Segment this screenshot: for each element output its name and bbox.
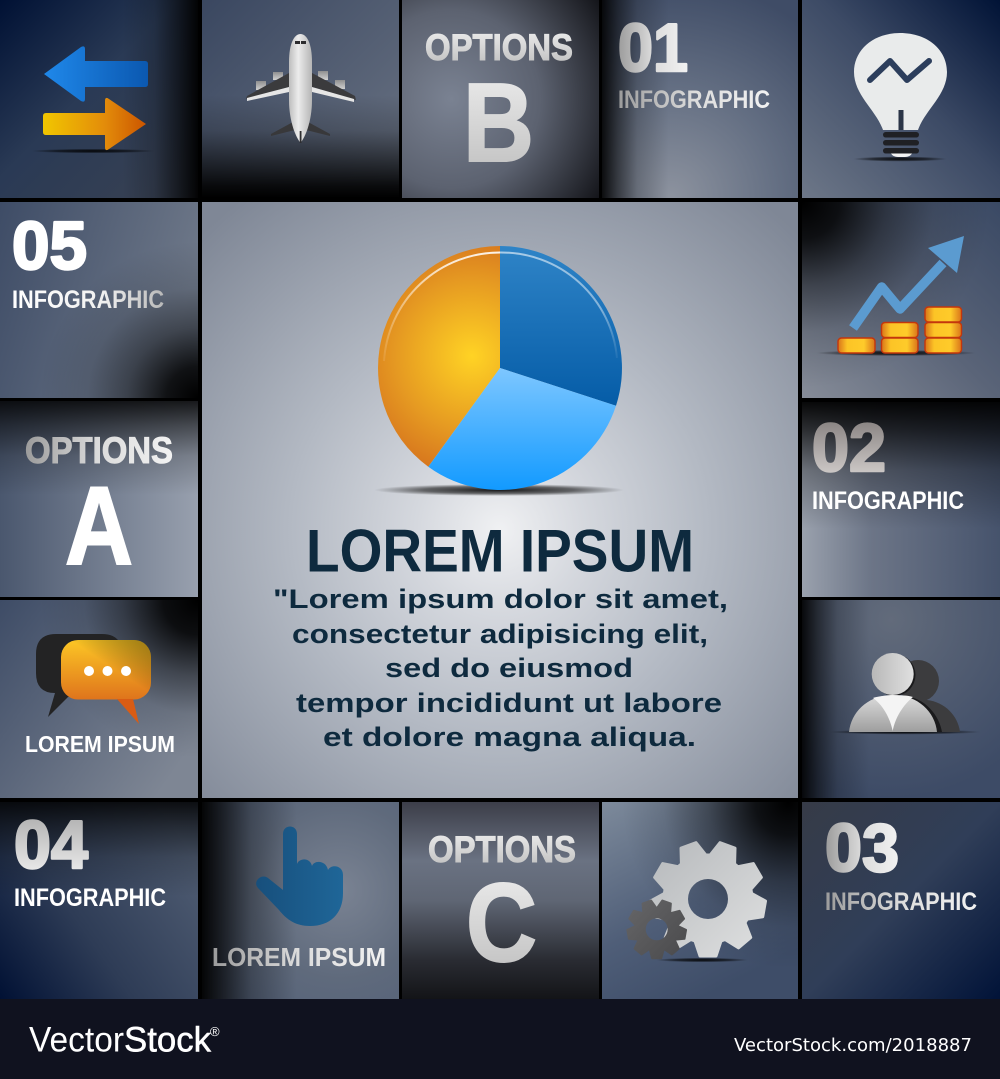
logo: VectorStock: Vector (29, 1020, 124, 1060)
panel: light bulb (802, 0, 1000, 198)
label: infographic: INFOGRAPHIC (14, 884, 166, 912)
icon: hand pointer (256, 826, 343, 926)
heading: options C: OPTIONS (428, 829, 576, 870)
icon: airplane (246, 34, 356, 143)
logo: VectorStock: ® (210, 1024, 220, 1039)
panel: options C (402, 802, 599, 999)
logo: VectorStock (29, 1020, 220, 1060)
panel: infographic 03 (802, 802, 1000, 999)
panel: infographic 01 (602, 0, 798, 198)
heading: options A: OPTIONS (25, 430, 173, 471)
icon: light bulb (853, 33, 947, 162)
title: LOREM IPSUM (306, 518, 694, 584)
heading: options B: OPTIONS (425, 27, 573, 68)
label: infographic: INFOGRAPHIC (618, 86, 770, 114)
letter C: C (466, 861, 537, 985)
logo: VectorStock: Stock (124, 1020, 211, 1060)
panel: people (802, 600, 1000, 798)
text block: et dolore magna aliqua. (323, 722, 696, 752)
panel: airplane (202, 0, 399, 198)
panel: infographic 04 (0, 802, 198, 999)
panel: gears (602, 802, 798, 999)
panel: chat (0, 600, 198, 798)
icon: gears (626, 841, 767, 962)
chart: pie (374, 246, 624, 496)
text block: consectetur adipisicing elit, (292, 619, 708, 649)
letter A: A (65, 464, 133, 588)
number 02: 02 (812, 410, 886, 486)
icon: people (829, 653, 981, 734)
number 01: 01 (618, 10, 688, 86)
icon: speech bubbles (36, 634, 151, 724)
text block: tempor incididunt ut labore (296, 688, 722, 718)
panel: arrows (0, 0, 198, 198)
footer url: VectorStock.com/2018887 (734, 1035, 972, 1056)
letter B: B (463, 61, 534, 185)
text block: "Lorem ipsum dolor sit amet, (273, 584, 728, 614)
text block (273, 584, 728, 752)
footer band (0, 999, 1000, 1079)
panel: growth chart (802, 202, 1000, 398)
panel: infographic 02 (802, 402, 1000, 597)
label: lorem ipsum: LOREM IPSUM (25, 731, 175, 757)
panel: options A (0, 401, 198, 597)
panel: hand pointer (202, 802, 399, 999)
label: lorem ipsum: LOREM IPSUM (212, 942, 386, 972)
label: infographic: INFOGRAPHIC (825, 888, 977, 916)
number 05: 05 (12, 208, 87, 284)
panel: options B (402, 0, 599, 198)
panel: infographic 05 (0, 202, 198, 398)
text block: sed do eiusmod (385, 653, 633, 683)
panel: center (202, 202, 798, 798)
number 04: 04 (14, 807, 88, 883)
icon: growth arrow and coins (816, 236, 976, 356)
icon: exchange arrows (31, 46, 155, 153)
number 03: 03 (825, 810, 899, 886)
label: infographic: INFOGRAPHIC (12, 286, 164, 314)
label: infographic: INFOGRAPHIC (812, 487, 964, 515)
